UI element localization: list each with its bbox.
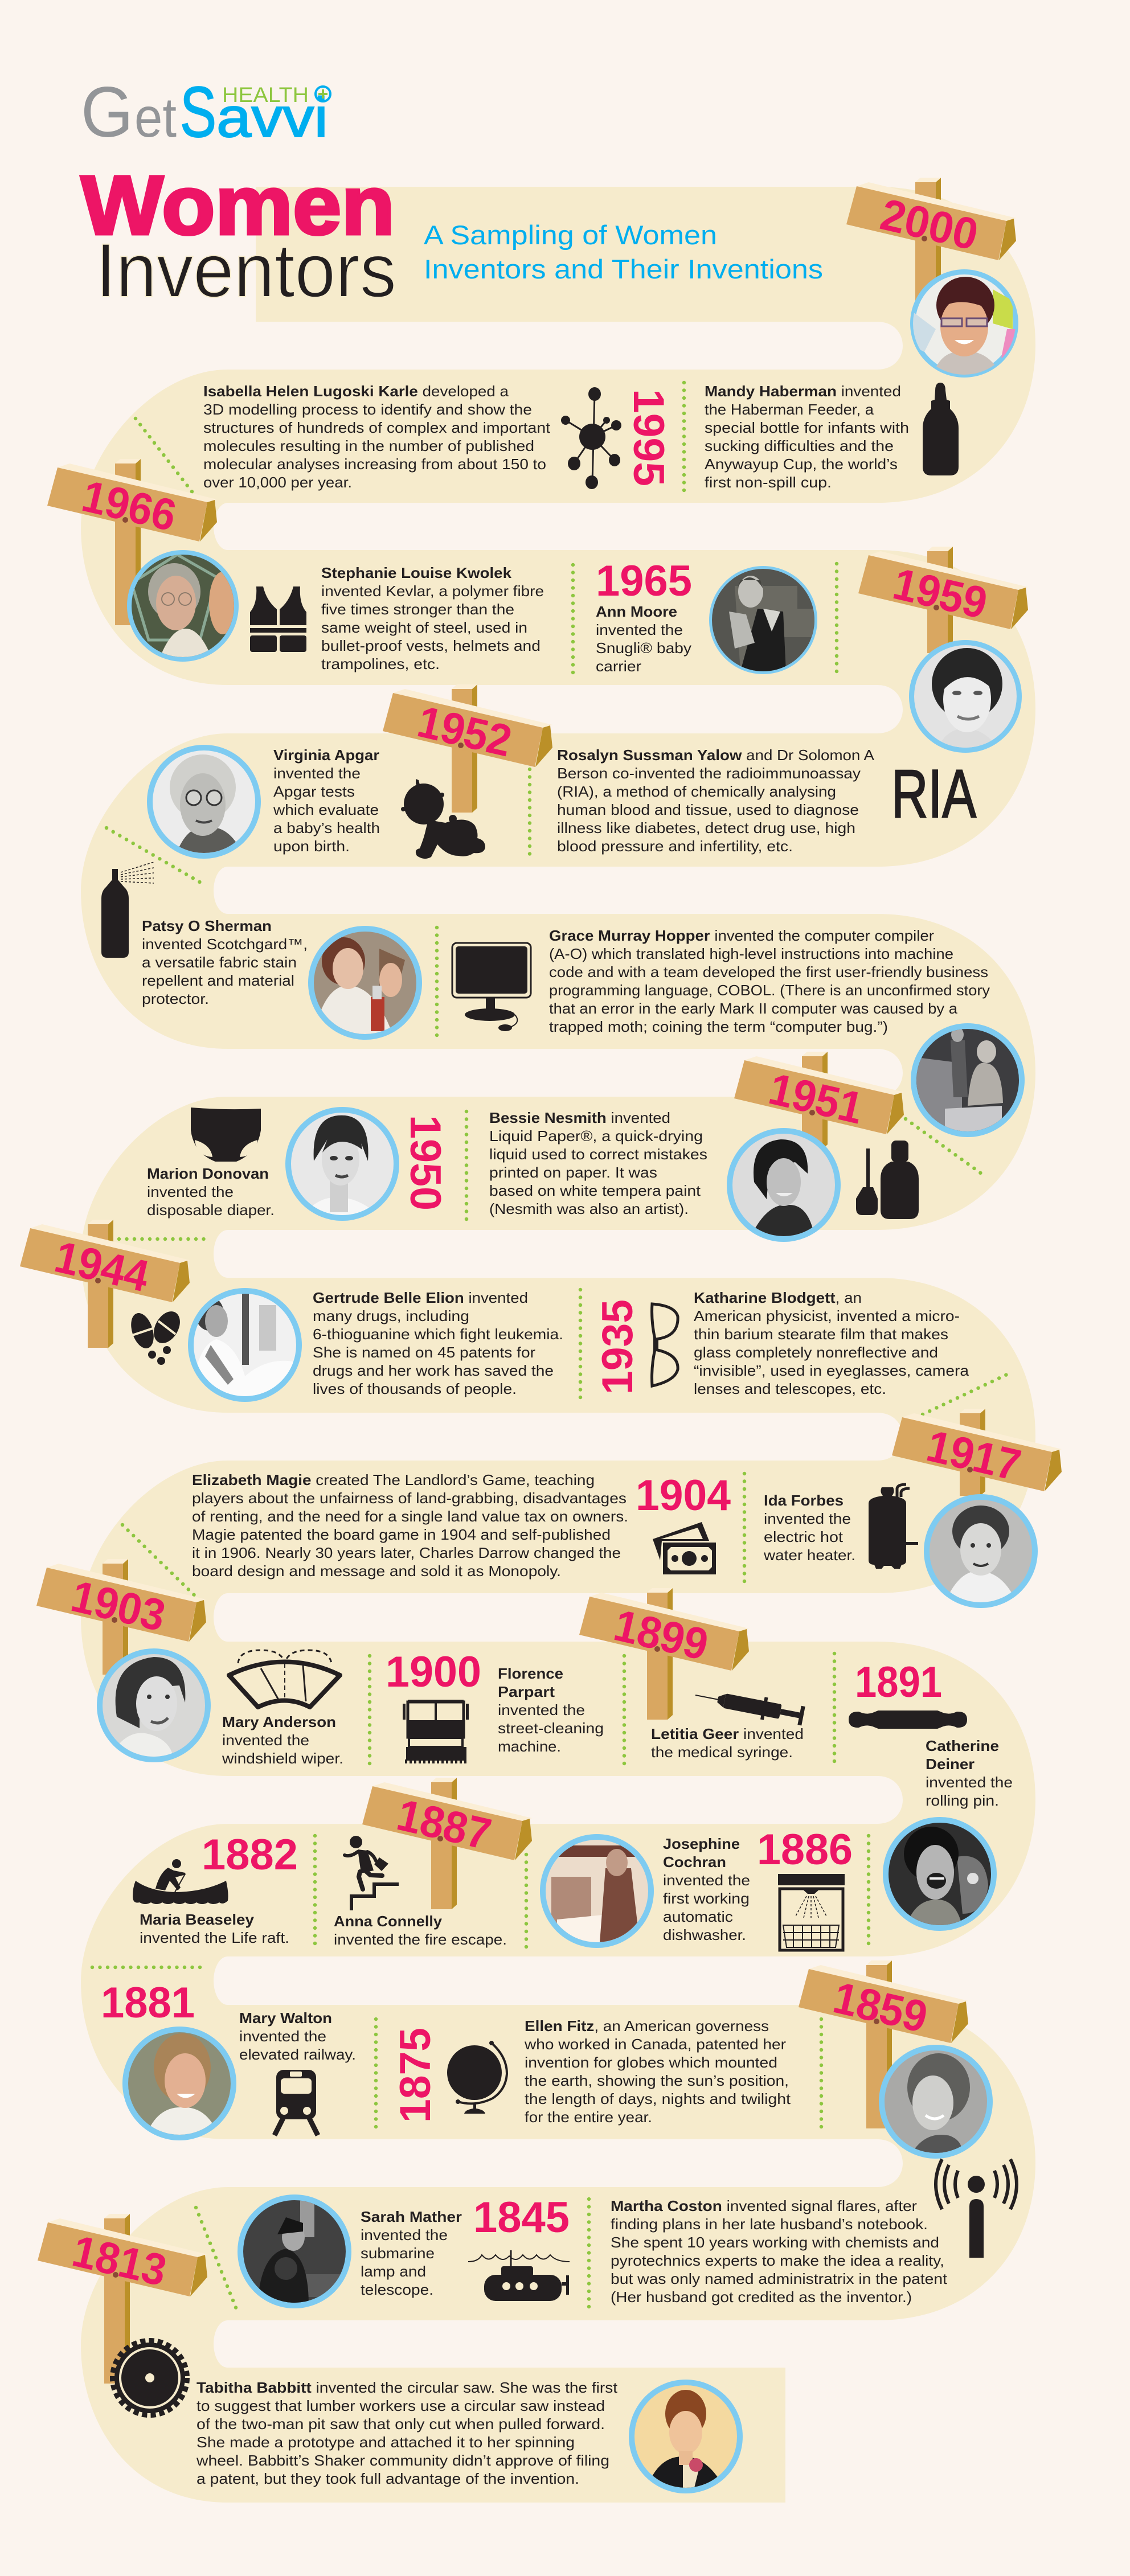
text: Elizabeth Magie: Magie patented the board game in 1904 and self-published [192, 1526, 611, 1543]
signpost: 1944 [20, 1220, 190, 1348]
year: 1886: 1886 [757, 1826, 853, 1874]
text: Isabella Karle: molecular analyses increasing from about 150 to [203, 456, 546, 473]
signpost: 1944: 1944 [50, 1231, 154, 1302]
signpost: 2000 [846, 178, 1016, 301]
icon: eyeglasses [652, 1304, 678, 1386]
signpost: 1917: 1917 [922, 1420, 1026, 1491]
icon: circular saw [113, 2341, 186, 2414]
text: Josephine Cochran: automatic [663, 1908, 733, 1925]
text: Elizabeth Magie: of renting, and the need for a single land value tax on owners. [192, 1508, 628, 1525]
icon: bullet-proof vest [250, 586, 306, 652]
text: Mary Anderson: invented the [222, 1732, 309, 1749]
text: Rosalyn Yalow: Berson co-invented the radioimmunoassay [557, 765, 861, 782]
year: 1845: 1845 [473, 2193, 570, 2242]
text: Mary Walton: elevated railway. [239, 2046, 356, 2063]
text: Josephine Cochran: dishwasher. [663, 1926, 746, 1943]
text: Stephanie Kwolek: five times stronger than the [321, 601, 514, 618]
text: Sarah Mather: invented the [361, 2226, 448, 2243]
photo: Josephine Cochran [540, 1834, 654, 1948]
signpost: 1899 [579, 1588, 749, 1720]
text: Mary Walton [239, 2009, 356, 2063]
year: 1904: 1904 [636, 1471, 731, 1520]
text: Patsy Sherman: protector. [142, 990, 209, 1007]
text: Tabitha Babbitt: a patent, but they took full advantage of the invention. [196, 2470, 579, 2487]
text: Gertrude Elion: lives of thousands of people. [313, 1380, 517, 1397]
photo: Ida Forbes [924, 1494, 1038, 1608]
text: Florence Parpart: Parpart [498, 1683, 555, 1700]
text: Bessie Nesmith [489, 1109, 707, 1217]
title: Women Inventors [81, 159, 396, 313]
signpost: 1952 [383, 684, 552, 813]
text: Mandy Haberman: Mandy Haberman invented [705, 383, 901, 400]
text: Ida Forbes [763, 1492, 855, 1564]
icon: baby bottle [923, 383, 959, 475]
icon: submarine [468, 2250, 570, 2301]
text: Ann Moore: invented the [596, 621, 683, 638]
text: Isabella Karle: over 10,000 per year. [203, 474, 352, 491]
text: Gertrude Elion: She is named on 45 patents for [313, 1344, 535, 1361]
text: Katharine Blodgett: “invisible”, used in eyeglasses, camera [694, 1362, 969, 1379]
text: Katharine Blodgett: American physicist, invented a micro- [694, 1307, 960, 1324]
text: Ellen Fitz: Ellen Fitz , an American governess [525, 2017, 769, 2034]
signpost: 1813 [38, 2214, 207, 2384]
text: Tabitha Babbitt: She made a prototype and attached it to her spinning [196, 2434, 575, 2451]
text: Catherine Deiner: rolling pin. [926, 1792, 999, 1809]
text: Katharine Blodgett: Katharine Blodgett , an [694, 1289, 862, 1306]
text: Grace Hopper [549, 927, 990, 1035]
title: Women Inventors: Inventors [96, 228, 396, 313]
text: Bessie Nesmith: printed on paper. It was [489, 1164, 657, 1181]
text: Tabitha Babbitt: to suggest that lumber workers use a circular saw instead [196, 2397, 605, 2414]
text: Martha Coston [611, 2197, 948, 2306]
signpost: 1966 [47, 459, 217, 625]
year: 1882: 1882 [202, 1831, 298, 1879]
photo: Mary Walton [122, 2027, 236, 2140]
icon: diaper [191, 1107, 261, 1162]
text: Florence Parpart: street-cleaning [498, 1720, 604, 1737]
text: Patsy Sherman: repellent and material [142, 972, 294, 989]
text: Ellen Fitz [524, 2017, 791, 2126]
text: Isabella Karle: Isabella Helen Lugoski Karle developed a [203, 383, 509, 400]
text: Virginia Apgar: upon birth. [273, 838, 350, 855]
text: Mandy Haberman: special bottle for infants with [705, 419, 909, 436]
icon: money [653, 1522, 716, 1574]
text: Bessie Nesmith: based on white tempera paint [489, 1182, 701, 1199]
text: Letitia Geer: Letitia Geer invented [651, 1725, 804, 1742]
photo: Mandy Haberman [910, 269, 1018, 378]
year: 1891: 1891 [855, 1658, 942, 1707]
icon: person on fire escape [345, 1836, 399, 1910]
icon: water heater [869, 1484, 918, 1569]
logo: GetSavvi Health: G [81, 73, 133, 152]
text: Stephanie Kwolek: Stephanie Louise Kwolek [321, 564, 512, 581]
text: Mandy Haberman: sucking difficulties and the [705, 437, 894, 454]
text: Stephanie Kwolek: same weight of steel, used in [321, 619, 527, 636]
text: Grace Hopper: Grace Murray Hopper invented the computer compiler [549, 927, 934, 944]
text: Catherine Deiner: invented the [926, 1774, 1013, 1791]
text: Ida Forbes: invented the [764, 1510, 851, 1527]
text: Ellen Fitz: for the entire year. [525, 2109, 652, 2126]
icon: molecule [561, 387, 621, 489]
icon: signal tower [936, 2159, 1017, 2258]
text: Elizabeth Magie [192, 1471, 628, 1580]
text: Mary Anderson: windshield wiper. [222, 1750, 343, 1767]
text: Catherine Deiner: Catherine [926, 1737, 999, 1754]
signpost: 1966: 1966 [77, 470, 181, 541]
logo: GetSavvi Health: HEALTH [222, 83, 309, 106]
icon: baby [401, 779, 485, 859]
text: Patsy Sherman: Patsy O Sherman [142, 917, 272, 934]
subtitle: A Sampling of Women [424, 220, 717, 250]
text: Tabitha Babbitt: of the two-man pit saw that only cut when pulled forward. [196, 2415, 605, 2433]
signpost: 1952: 1952 [413, 696, 517, 766]
text: Patsy Sherman [142, 917, 308, 1007]
year: 1875: 1875 [391, 2028, 440, 2123]
text: Katharine Blodgett [694, 1289, 969, 1397]
photo: Sarah Mather [238, 2194, 351, 2308]
text: Ann Moore: carrier [596, 658, 641, 675]
photo: Catherine Deiner [883, 1817, 997, 1931]
text: Rosalyn Yalow [557, 746, 875, 855]
icon: computer monitor [452, 943, 531, 1031]
text: Grace Hopper: (A-O) which translated high-level instructions into machine [549, 945, 953, 962]
text: Letitia Geer [651, 1725, 804, 1761]
year: 1935: 1935 [593, 1299, 642, 1394]
text: Virginia Apgar: a baby’s health [273, 819, 380, 836]
text: Rosalyn Yalow: (RIA), a method of chemically analysing [557, 783, 836, 800]
text: Mary Anderson: Mary Anderson [222, 1713, 336, 1730]
title: Women Inventors: Women [81, 159, 395, 252]
signpost: 1917 [892, 1409, 1062, 1496]
photo: Bessie Nesmith [727, 1128, 841, 1242]
text: Maria Beaseley: Maria Beaseley [140, 1911, 255, 1928]
text: Ida Forbes: water heater. [763, 1547, 855, 1564]
text: Elizabeth Magie: Elizabeth Magie created The Landlord’s Game, teaching [192, 1471, 595, 1488]
icon: globe [447, 2041, 507, 2114]
signpost: 1813: 1813 [68, 2225, 171, 2296]
icon: dishwasher [778, 1874, 845, 1950]
signpost: 1899: 1899 [609, 1599, 713, 1670]
text: Letitia Geer: the medical syringe. [651, 1744, 793, 1761]
text: Tabitha Babbitt [196, 2379, 618, 2487]
text: Ann Moore: Ann Moore [596, 603, 677, 620]
text: Ellen Fitz: who worked in Canada, patented her [524, 2036, 786, 2053]
text: Elizabeth Magie: players about the unfairness of land-grabbing, disadvantages [192, 1490, 627, 1507]
text: Stephanie Kwolek: invented Kevlar, a polymer fibre [321, 583, 544, 600]
signpost: 1887 [362, 1778, 532, 1909]
icon: correction fluid [856, 1141, 919, 1219]
subtitle [424, 220, 823, 284]
RIA label: RIA [891, 756, 976, 832]
text: Isabella Karle: structures of hundreds of complex and important [203, 419, 551, 436]
text: Stephanie Kwolek [321, 564, 544, 672]
icon: street-cleaning machine [403, 1700, 469, 1763]
text: Marion Donovan: Marion Donovan [147, 1165, 269, 1182]
text: Ellen Fitz: the earth, showing the sun’s position, [525, 2072, 789, 2089]
text: Rosalyn Yalow: Rosalyn Sussman Yalow and Dr Solomon A [557, 746, 875, 764]
text: Maria Beaseley: invented the Life raft. [140, 1929, 289, 1946]
text: Mary Walton: Mary Walton [239, 2009, 332, 2027]
text: Ellen Fitz: invention for globes which mounted [525, 2054, 777, 2071]
text: Ida Forbes: electric hot [764, 1528, 844, 1545]
photo: Stephanie Kwolek [126, 549, 240, 663]
logo: GetSavvi Health: avvi [216, 86, 328, 149]
text: Stephanie Kwolek: trampolines, etc. [321, 655, 440, 672]
text: Martha Coston: She spent 10 years working with chemists and [611, 2234, 939, 2251]
text: Ida Forbes: Ida Forbes [764, 1492, 844, 1509]
text: Ellen Fitz: the length of days, nights and twilight [525, 2090, 791, 2107]
text: Sarah Mather: submarine [361, 2245, 435, 2262]
photo: Gertrude Elion [188, 1288, 302, 1402]
text: Stephanie Kwolek: bullet-proof vests, helmets and [321, 637, 541, 654]
icon: train [275, 2070, 318, 2135]
text: Elizabeth Magie: it in 1906. Nearly 30 years later, Charles Darrow changed the [192, 1544, 621, 1561]
text: Tabitha Babbitt: wheel. Babbitt’s Shaker community didn’t approve of filing [196, 2452, 609, 2469]
text: Catherine Deiner [926, 1737, 1013, 1809]
text: Isabella Karle [203, 383, 551, 491]
year: 1995: 1995 [624, 389, 673, 486]
text: Gertrude Elion: 6-thioguanine which fight leukemia. [313, 1326, 563, 1343]
text: Josephine Cochran: invented the [663, 1872, 750, 1889]
text: Isabella Karle: 3D modelling process to identify and show the [203, 401, 532, 418]
text: Grace Hopper: that an error in the early Mark II computer was caused by a [549, 1000, 958, 1017]
signpost: 1951 [734, 1052, 904, 1149]
year: 1950: 1950 [401, 1115, 449, 1211]
text: Patsy Sherman: invented Scotchgard™, [142, 936, 308, 953]
text: Florence Parpart: invented the [498, 1701, 585, 1718]
logo: GetSavvi Health: et [134, 86, 177, 149]
text: Rosalyn Yalow: human blood and tissue, used to diagnose [557, 801, 859, 818]
photo: Grace Hopper [911, 1023, 1025, 1137]
subtitle: Inventors and Their Inventions [424, 254, 823, 284]
text: Martha Coston: Martha Coston invented signal flares, after [611, 2197, 917, 2214]
signpost: 1903 [36, 1559, 206, 1675]
text: Catherine Deiner: Deiner [926, 1755, 975, 1773]
signpost: 1887: 1887 [392, 1789, 496, 1860]
year: 1881: 1881 [101, 1979, 195, 2027]
text: Josephine Cochran: first working [663, 1890, 750, 1907]
text: Bessie Nesmith: Liquid Paper®, a quick-drying [489, 1127, 703, 1145]
text: Virginia Apgar [273, 746, 380, 855]
text: Katharine Blodgett: lenses and telescopes, etc. [694, 1380, 886, 1397]
text: Florence Parpart [498, 1665, 604, 1755]
text: Katharine Blodgett: thin barium stearate film that makes [694, 1326, 948, 1343]
text: Sarah Mather: telescope. [361, 2281, 433, 2298]
text: Sarah Mather [361, 2208, 462, 2298]
text: Sarah Mather: Sarah Mather [361, 2208, 462, 2225]
text: Mandy Haberman: the Haberman Feeder, a [705, 401, 874, 418]
text: Virginia Apgar: invented the [273, 765, 361, 782]
text: Sarah Mather: lamp and [361, 2263, 426, 2280]
photo: Virginia Apgar [147, 745, 261, 859]
signpost: 2000: 2000 [876, 189, 982, 260]
text: Josephine Cochran [663, 1835, 750, 1943]
text: Elizabeth Magie: board design and message and sold it as Monopoly. [192, 1562, 561, 1580]
text: Gertrude Elion: many drugs, including [313, 1307, 469, 1324]
text: Martha Coston: finding plans in her late husband’s notebook. [611, 2216, 928, 2233]
signpost: 1959 [858, 547, 1028, 653]
icon: pills [127, 1307, 185, 1365]
text: Anna Connelly: invented the fire escape. [334, 1931, 507, 1948]
text: Rosalyn Yalow: illness like diabetes, detect drug use, high [557, 819, 855, 836]
text: Mandy Haberman [705, 383, 909, 491]
text: Maria Beaseley [140, 1911, 289, 1946]
year: 1900: 1900 [386, 1648, 481, 1696]
text: Bessie Nesmith: (Nesmith was also an artist). [489, 1200, 689, 1217]
text: Marion Donovan: invented the [147, 1183, 234, 1200]
text: Anna Connelly [334, 1913, 507, 1948]
text: Martha Coston: but was only named administratrix in the patent [611, 2270, 948, 2287]
photo: Tabitha Babbitt [629, 2380, 743, 2493]
text: Josephine Cochran: Josephine [663, 1835, 740, 1852]
signpost: 1959: 1959 [889, 558, 992, 629]
logo: GetSavvi Health [81, 73, 330, 152]
text: Katharine Blodgett: glass completely nonreflective and [694, 1344, 938, 1361]
icon: spray can [101, 862, 154, 958]
text: Mandy Haberman: first non-spill cup. [705, 474, 832, 491]
text: Mandy Haberman: Anywayup Cup, the world’s [705, 456, 898, 473]
text: Grace Hopper: programming language, COBOL. (There is an unconfirmed story [549, 982, 990, 999]
year: 1965: 1965 [596, 557, 692, 605]
text: Isabella Karle: molecules resulting in the number of published [203, 437, 534, 454]
text: Gertrude Elion: Gertrude Belle Elion invented [313, 1289, 528, 1306]
signpost: 1951: 1951 [764, 1063, 868, 1134]
text: Tabitha Babbitt: Tabitha Babbitt invented the circular saw. She was the first [196, 2379, 618, 2396]
logo: GetSavvi Health: S [180, 73, 216, 152]
photo: Mary Anderson [97, 1648, 211, 1762]
text: Grace Hopper: trapped moth; coining the term “computer bug.”) [549, 1018, 888, 1035]
text: Marion Donovan [147, 1165, 275, 1219]
text: Bessie Nesmith: Bessie Nesmith invented [489, 1109, 670, 1126]
text: Grace Hopper: code and with a team developed the first user-friendly business [549, 963, 988, 981]
text: Florence Parpart: machine. [498, 1738, 561, 1755]
signpost: 1859 [799, 1960, 968, 2128]
text: Patsy Sherman: a versatile fabric stain [142, 954, 297, 971]
text: Gertrude Elion: drugs and her work has saved the [313, 1362, 554, 1379]
text: Mary Walton: invented the [239, 2028, 326, 2045]
text: Martha Coston: (Her husband got credited as the inventor.) [611, 2288, 912, 2306]
winding timeline road [81, 187, 1035, 2503]
text: Virginia Apgar: which evaluate [273, 801, 379, 818]
text: Virginia Apgar: Apgar tests [273, 783, 355, 800]
photo: Ann Moore [706, 563, 820, 677]
text: Josephine Cochran: Cochran [663, 1853, 726, 1871]
text: Martha Coston: pyrotechnics experts to make the idea a reality, [611, 2252, 944, 2269]
text: Bessie Nesmith: liquid used to correct mistakes [489, 1146, 707, 1163]
signpost: 1903: 1903 [67, 1570, 170, 1641]
text: Anna Connelly: Anna Connelly [334, 1913, 443, 1930]
text: Mary Anderson [222, 1713, 343, 1767]
icon: windshield wiper [229, 1650, 340, 1707]
photo: Marion Donovan [285, 1107, 399, 1221]
text: Ann Moore: Snugli® baby [596, 639, 691, 657]
photo: Rosalyn Yalow [908, 639, 1022, 753]
text: Florence Parpart: Florence [498, 1665, 563, 1682]
icon: canoe [133, 1859, 228, 1904]
photo: Patsy Sherman [308, 926, 422, 1040]
text: Ann Moore [596, 603, 691, 675]
icon: syringe [693, 1684, 805, 1727]
photo: Ellen Fitz [879, 2045, 993, 2159]
icon: rolling pin [849, 1711, 967, 1729]
signpost: 1859: 1859 [829, 1972, 932, 2042]
text: Marion Donovan: disposable diaper. [147, 1201, 275, 1219]
text: Rosalyn Yalow: blood pressure and infertility, etc. [557, 838, 793, 855]
text: Virginia Apgar: Virginia Apgar [273, 746, 379, 764]
text: Gertrude Elion [313, 1289, 563, 1397]
